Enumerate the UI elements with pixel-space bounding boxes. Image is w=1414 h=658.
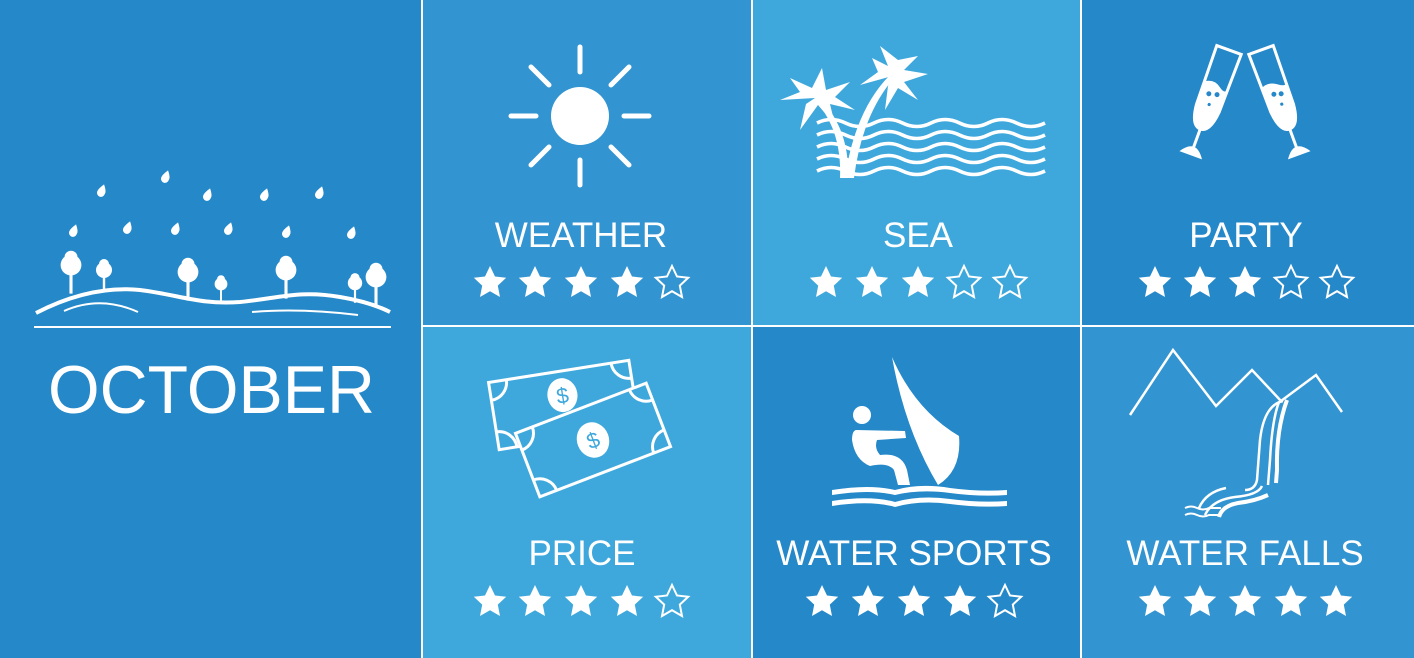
icon: mountains and waterfall	[1130, 350, 1342, 517]
icon: sun	[511, 47, 649, 185]
icon: banknotes	[489, 360, 671, 497]
heading: water sports: WATER SPORTS	[776, 534, 1052, 573]
panel: price	[422, 327, 752, 658]
icon: champagne glasses	[1178, 46, 1312, 160]
panel: water sports	[753, 327, 1080, 658]
icon: windsurfer	[832, 357, 1007, 507]
heading: price: PRICE	[529, 534, 635, 573]
heading: water falls: WATER FALLS	[1126, 534, 1364, 573]
panel: party	[1082, 0, 1414, 326]
rating: sea 3 stars	[810, 266, 1026, 297]
icon: banknotes: $	[583, 427, 603, 454]
rating: water sports 4 stars	[806, 585, 1021, 616]
heading: weather: WEATHER	[495, 216, 667, 255]
icon: banknotes: $	[555, 382, 571, 409]
rating: party 3 stars	[1139, 266, 1353, 297]
panel: water falls	[1082, 327, 1414, 658]
icon: rain landscape	[34, 169, 391, 328]
rating: weather 4 stars	[474, 266, 688, 297]
title: october: OCTOBER	[48, 352, 375, 428]
heading: party: PARTY	[1189, 216, 1303, 255]
panel: weather	[422, 0, 752, 326]
panel: october	[0, 0, 421, 658]
panel: sea	[753, 0, 1080, 326]
heading: sea: SEA	[883, 216, 954, 255]
rating: price 4 stars	[474, 585, 688, 616]
rating: water falls 5 stars	[1139, 585, 1352, 616]
icon: palms and waves	[780, 46, 1045, 178]
